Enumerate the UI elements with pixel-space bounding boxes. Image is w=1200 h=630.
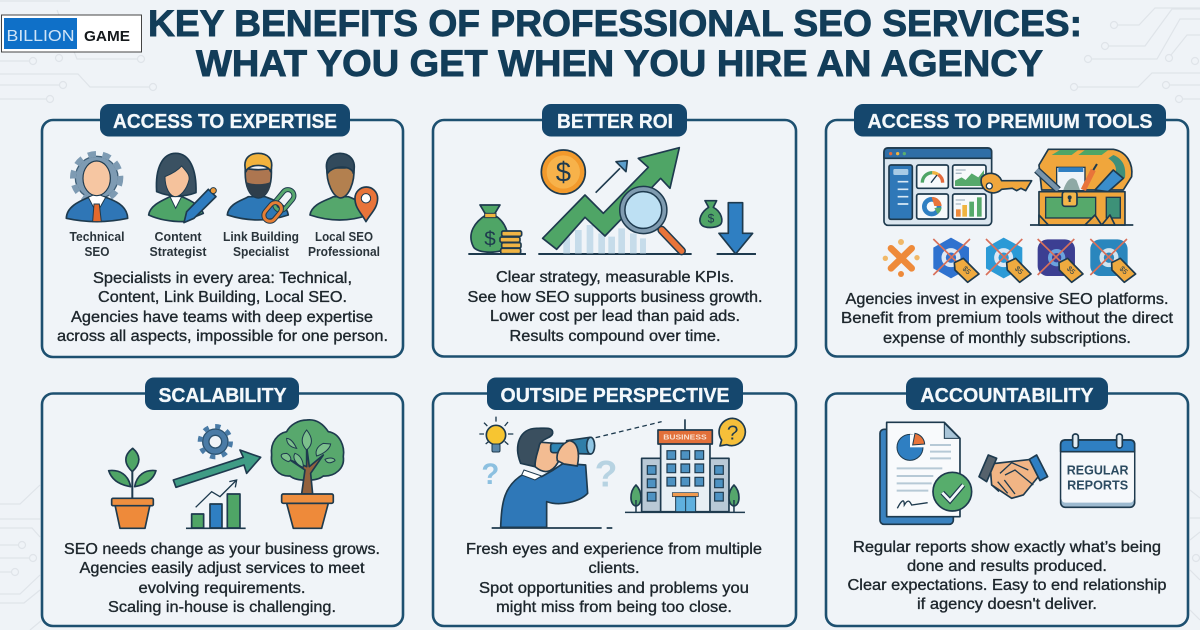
text: ROI description: See how SEO supports business growth. [468,289,762,306]
icon: dollar coin [541,150,585,194]
icon: tool logo one: $5 [961,264,973,276]
icon: money bag and coins: $ [484,227,496,250]
text: perspective description: Spot opportunities and problems you [479,580,749,597]
icon: ROI growth chart [468,148,756,254]
text: scalability description: Scaling in-house is challenging. [108,599,336,616]
logo [2,15,142,52]
icon: tool logo four: $5 [1118,264,1130,276]
labels: specialist roles: Strategist [150,245,207,259]
icon: dashboard and key [884,148,1032,225]
text: accountability description: if agency doesn't deliver. [917,596,1097,613]
icon: tool logo three: $5 [1065,264,1077,276]
icon: local SEO professional [310,153,378,222]
heading: better ROI [542,104,687,136]
text: scalability description: Agencies easily adjust services to meet [80,560,365,577]
heading: scalability [145,378,299,410]
text: ROI description: Clear strategy, measurable KPIs. [496,269,734,286]
text: perspective description: Fresh eyes and experience from multiple [466,541,762,558]
icon: handshake [979,455,1048,498]
text: tools description: Benefit from premium tools without the direct [841,310,1174,327]
labels: specialist roles: Specialist [233,245,290,259]
icon: tool logo one [933,238,979,282]
panel: accountability [826,378,1188,626]
icon: business building [625,418,745,512]
text: tools description: expense of monthly subscriptions. [883,330,1131,347]
icon: signed report with check mark [880,422,972,524]
labels: specialist roles: Content [154,230,202,244]
labels: specialist roles: Professional [308,245,380,259]
icon: treasure chest of tools [1030,149,1133,225]
icon: light bulb [479,417,513,452]
text: ROI description [468,269,762,345]
icon: regular reports calendar: REGULAR [1067,464,1128,478]
text: scalability description: SEO needs change as your business grows. [64,541,380,558]
heading: access to expertise: ACCESS TO EXPERTISE [113,111,337,133]
panel: outside perspective [433,378,796,626]
text: accountability description: Clear expectations. Easy to end relationship [848,577,1166,594]
text: accountability description [848,539,1166,613]
icon: regular reports calendar: REPORTS [1067,479,1128,493]
icon: growth arrow, gear and bars [173,426,261,528]
icon: free tool logo [883,239,920,277]
title: WHAT YOU GET WHEN YOU HIRE AN AGENCY [196,43,1043,84]
icon: SEO tool logos with price tags [883,238,1136,282]
heading: access to premium tools: ACCESS TO PREMIUM TOOLS [868,111,1152,133]
icon: person with binoculars: ? [595,453,617,495]
heading: better ROI: BETTER ROI [557,111,673,133]
text: perspective description: might miss from being too close. [496,599,732,616]
text: tools description [841,291,1174,347]
labels: specialist roles: Local SEO [315,230,373,244]
heading: outside perspective [487,378,743,410]
text: scalability description: evolving requirements. [138,580,306,597]
text: tools description: Agencies invest in expensive SEO platforms. [846,291,1168,308]
heading: accountability: ACCOUNTABILITY [920,385,1094,407]
text: accountability description: done and results produced. [907,558,1107,575]
text: ROI description: Lower cost per lead than paid ads. [490,308,740,325]
title [148,3,1082,84]
icon: content strategist [149,153,216,223]
icon: tool logo two [986,238,1031,282]
heading: access to expertise [100,104,350,136]
title: KEY BENEFITS OF PROFESSIONAL SEO SERVICES: [148,3,1082,44]
icon: tool logo three [1038,239,1083,282]
text: perspective description [466,541,762,616]
icon: money bag and coins [471,205,522,254]
text: expertise description: across all aspects, impossible for one person. [57,328,388,345]
icon: dollar coin: $ [556,157,571,188]
icon: technical SEO specialist [66,154,128,222]
panel: access to expertise [42,104,403,357]
icon: tree in pot [271,420,344,528]
text: expertise description: Specialists in every area: Technical, [93,270,352,287]
icon: small bag and down arrow [700,201,753,254]
icon: small bag and down arrow: $ [708,212,715,226]
labels: specialist roles [70,230,380,259]
logo: BILLION [6,28,74,45]
icon: business building: BUSINESS [663,432,707,441]
icon: tool logo four [1090,239,1136,282]
icon: person with binoculars: ? [481,458,499,491]
labels: specialist roles: Link Building [223,230,299,244]
text: expertise description: Agencies have teams with deep expertise [71,309,373,326]
labels: specialist roles: Technical [70,230,124,244]
text: expertise description: Content, Link Building, Local SEO. [98,289,347,306]
panel: better ROI [433,104,796,356]
icon: question speech bubble: ? [727,421,738,444]
text: expertise description [57,270,388,345]
icon: seedling in pot [109,448,156,528]
logo: GAME [84,28,130,45]
icon: regular reports calendar [1061,434,1135,507]
labels: specialist roles: SEO [84,245,110,259]
heading: outside perspective: OUTSIDE PERSPECTIVE [500,385,730,407]
text: ROI description: Results compound over time. [510,328,720,345]
heading: access to premium tools [854,104,1166,136]
panel: scalability [42,378,403,626]
heading: accountability [906,378,1108,410]
icon: tool logo two: $5 [1013,264,1025,276]
text: accountability description: Regular reports show exactly what’s being [853,539,1161,556]
text: scalability description [64,541,380,616]
heading: scalability: SCALABILITY [158,385,287,407]
text: perspective description: clients. [588,560,640,577]
icon: link building specialist [227,153,296,224]
panel: access to premium tools [826,104,1188,356]
icon: person with binoculars [479,417,662,528]
